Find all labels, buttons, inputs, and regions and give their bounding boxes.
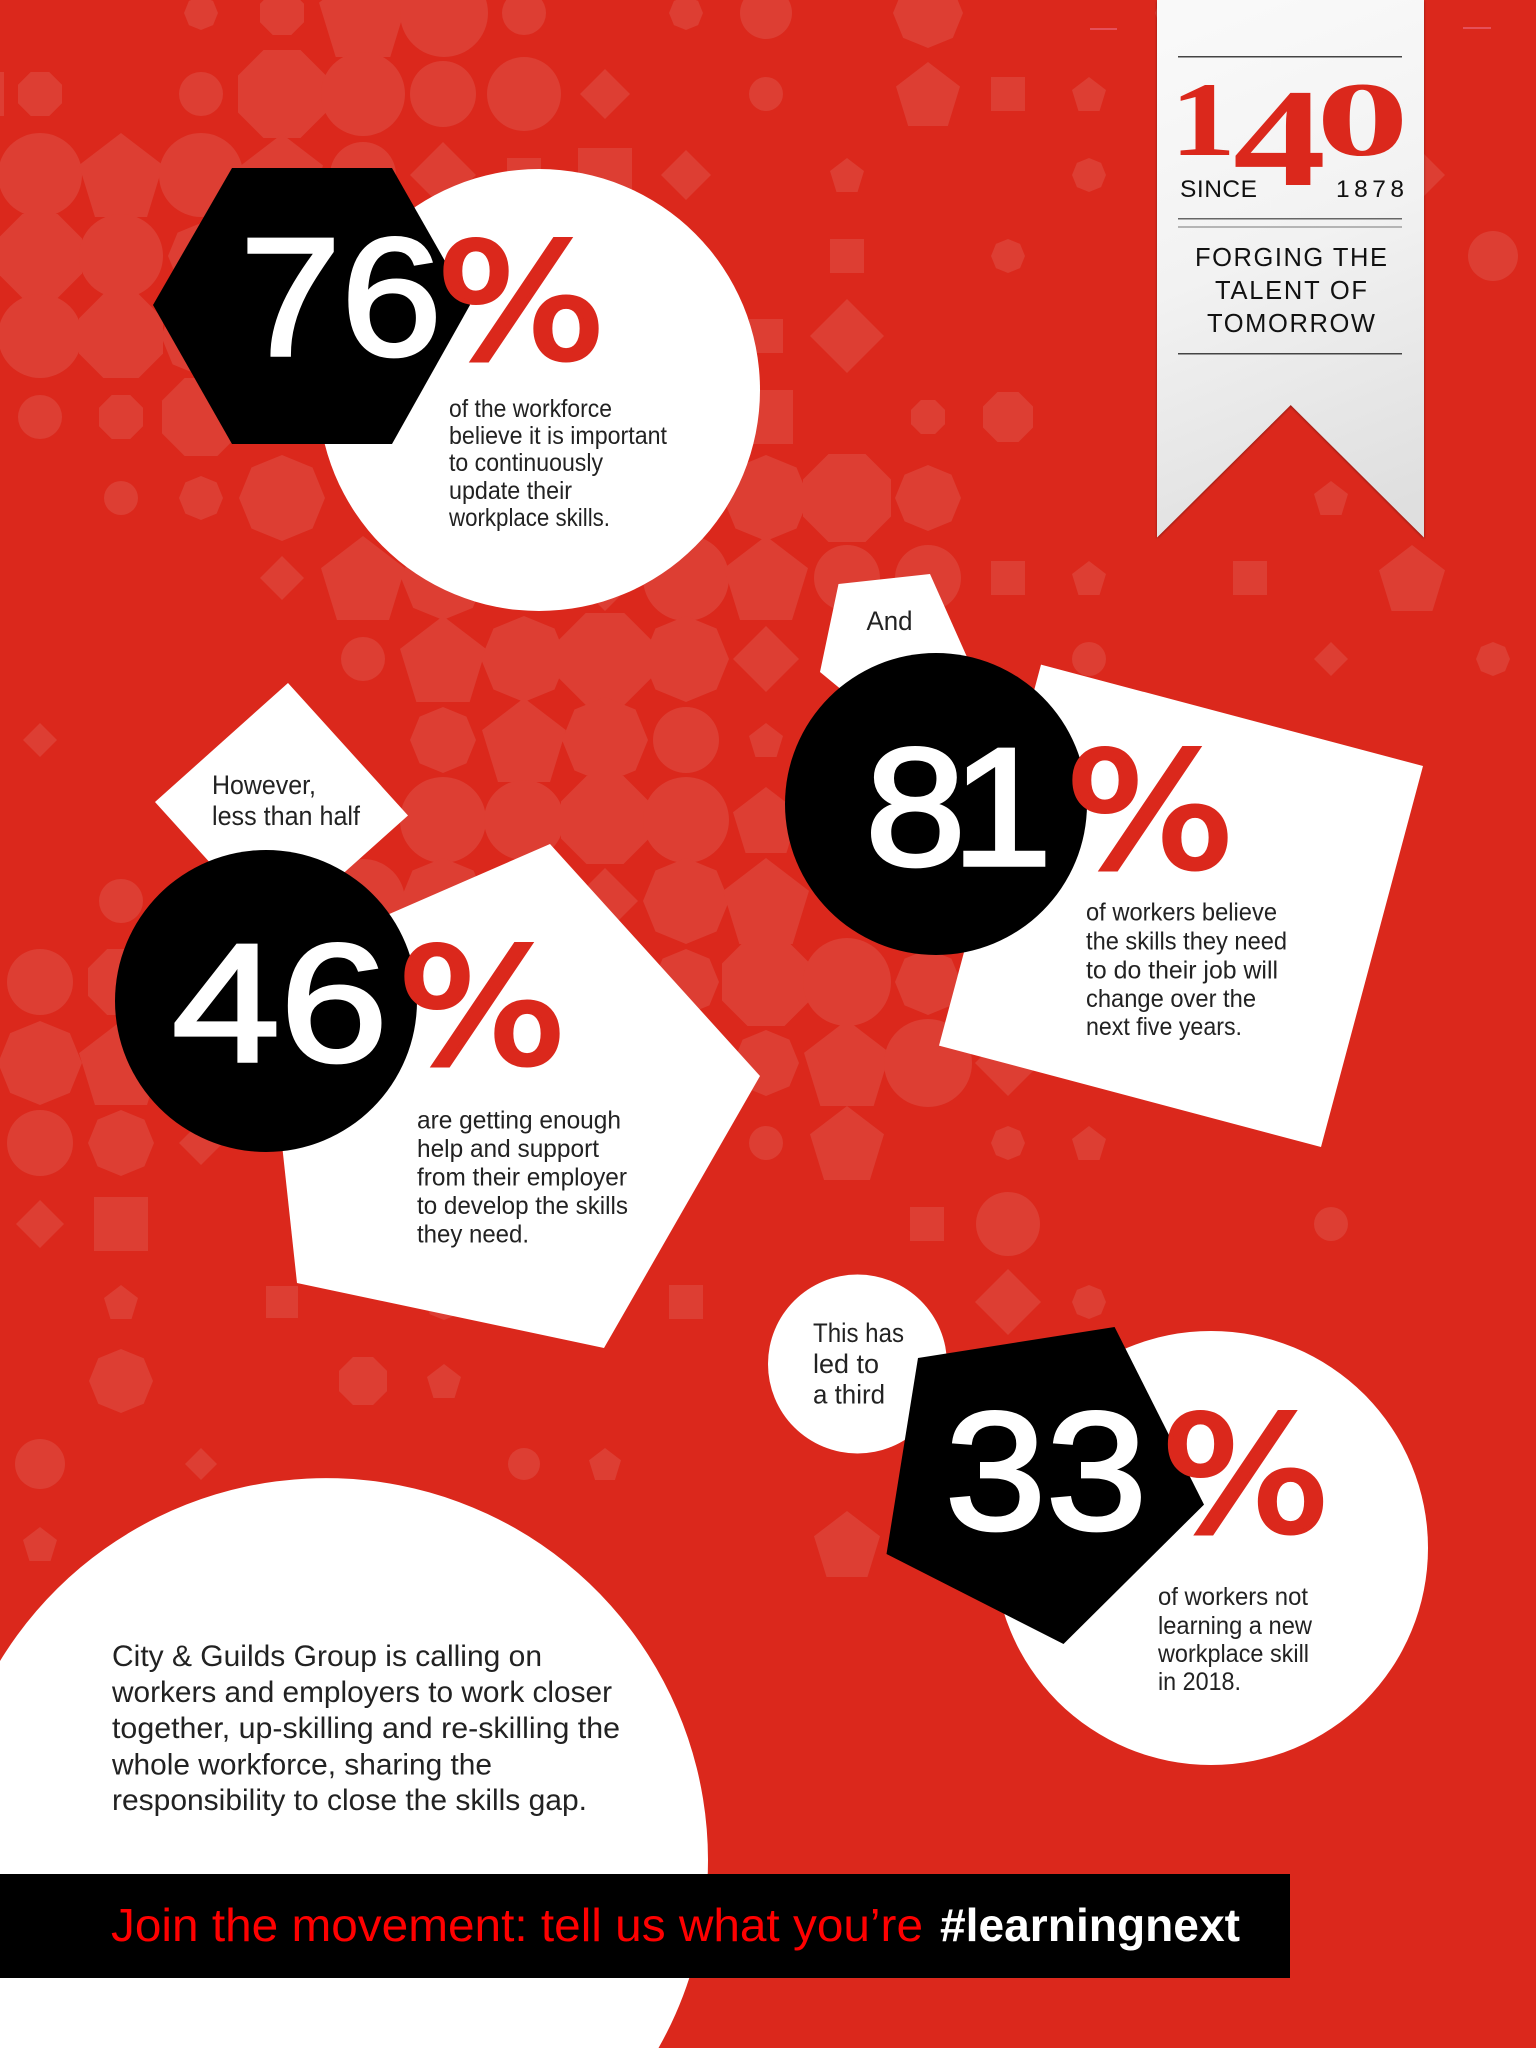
description: they need. [417,1220,529,1248]
body text [111,1640,620,1817]
description: are getting enough [417,1106,621,1134]
description: change over the [1086,985,1256,1013]
black circle [785,653,1087,955]
callout text: And [866,606,912,636]
description [417,1106,628,1248]
number 46: 46 [172,909,388,1097]
since 1878: SINCE [1180,176,1257,203]
body text: workers and employers to work closer [111,1676,612,1709]
ribbon badge: 140 since 1878: 1878 [1336,176,1404,203]
description [448,395,667,532]
body text: City & Guilds Group is calling on [112,1640,542,1673]
description: learning a new [1158,1612,1313,1640]
white rotated square [939,665,1423,1147]
description: help and support [417,1135,599,1163]
description: believe it is important [449,422,667,450]
callout text [813,1318,904,1410]
140 logo numerals [1170,61,1409,216]
description: next five years. [1086,1013,1242,1041]
tagline: FORGING THE [1195,244,1387,272]
140 logo numerals: 0 [1316,61,1409,178]
ribbon shape [1157,0,1424,538]
body text: together, up-skilling and re-skilling the [112,1712,620,1745]
description: to develop the skills [417,1192,628,1220]
body text: responsibility to close the skills gap. [112,1784,587,1817]
percent sign: % [1160,1382,1330,1569]
description: in 2018. [1158,1668,1241,1696]
percent sign: % [397,914,567,1101]
background pattern of geometric shapes [0,0,1518,1577]
tagline: TALENT OF [1215,277,1367,305]
black circle [115,850,417,1152]
140 logo numerals: 1 [1170,61,1236,178]
description [1086,898,1287,1041]
panel: 46 percent [115,683,760,1348]
white callout shape [820,574,975,705]
callout text: This has [813,1318,904,1348]
white circle [994,1331,1428,1765]
large white circle [0,1478,708,2048]
panel: 33 percent [768,1274,1428,1765]
panel: call to action [0,1478,1290,2048]
panel: 76 percent [153,168,760,611]
description: update their [449,477,572,505]
white callout circle [768,1274,947,1454]
hashtag: #learningnext [940,1899,1240,1951]
body text: whole workforce, sharing the [111,1748,492,1782]
panel: 81 percent [785,574,1423,1147]
white diamond callout [155,683,408,934]
description: of the workforce [449,395,612,423]
black hexagon [153,168,470,444]
description [1157,1583,1313,1696]
black pentagon [886,1327,1204,1644]
ribbon badge: 140 since 1878 [1157,0,1424,538]
description: from their employer [417,1164,627,1192]
callout text: led to [813,1349,879,1379]
description: of workers not [1158,1583,1308,1611]
number 81: 81 [865,714,1052,902]
callout text: a third [813,1380,885,1410]
number 76: 76 [240,203,442,391]
description: to do their job will [1086,956,1278,984]
call to action text: Join the movement: tell us what you’re [111,1899,923,1951]
description: to continuously [449,449,603,477]
ribbon rules [1178,56,1402,354]
black bar [0,1874,1290,1978]
description: of workers believe [1086,898,1277,926]
callout text: However, [212,770,316,800]
percent sign: % [436,209,606,396]
callout text: less than half [212,801,360,831]
tagline [1195,244,1387,338]
white pentagon [263,844,760,1348]
percent sign: % [1065,718,1235,905]
description: workplace skills. [448,504,610,532]
number 33: 33 [945,1377,1147,1565]
description: workplace skill [1157,1640,1309,1668]
callout text [212,770,360,831]
white circle [318,169,760,611]
description: the skills they need [1086,928,1287,956]
140 logo numerals: 4 [1233,61,1326,216]
tagline: TOMORROW [1207,310,1375,338]
